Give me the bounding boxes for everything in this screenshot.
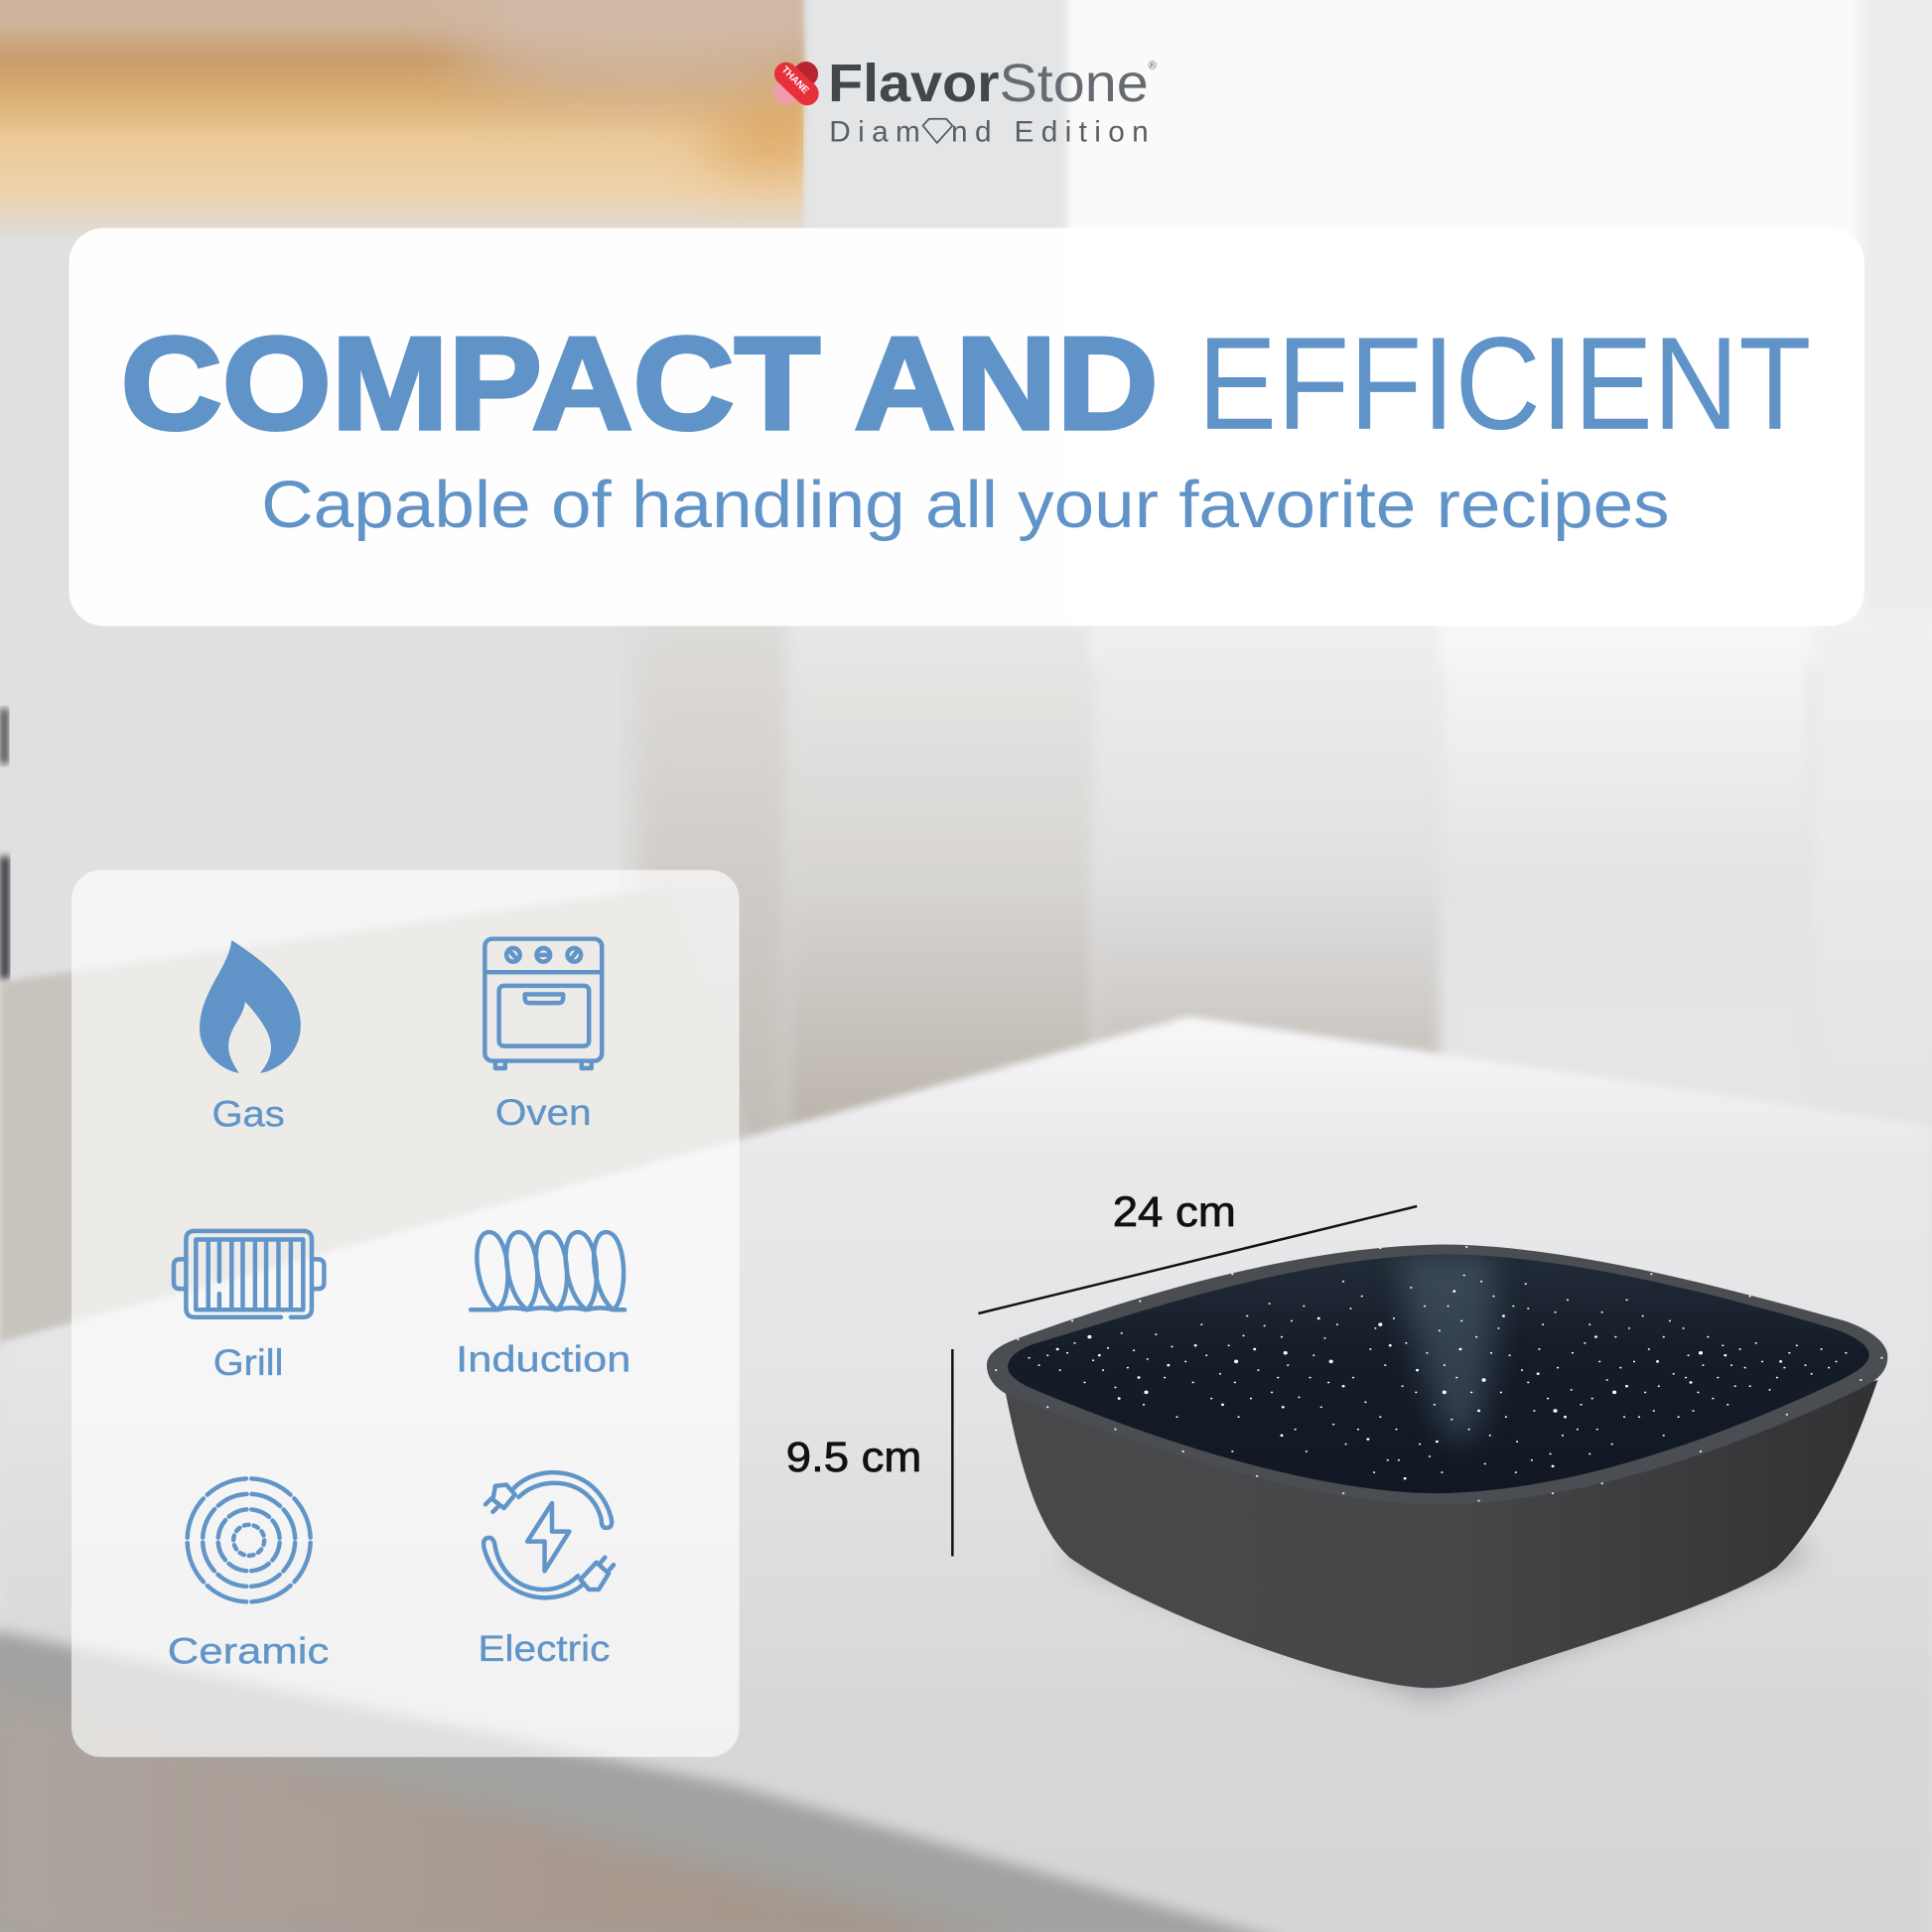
icon: gas flame <box>200 940 301 1073</box>
panel: headline card <box>69 228 1864 625</box>
icon: electric <box>483 1472 614 1597</box>
bowl highlight <box>1399 1254 1495 1440</box>
label: 24 cm: 24 cm <box>1113 1188 1236 1235</box>
label: Gas: Gas <box>211 1092 285 1134</box>
icon: diamond <box>923 119 952 143</box>
bowl shadow <box>1062 1528 1811 1698</box>
dimension: width <box>978 1188 1417 1313</box>
bowl rim <box>987 1244 1887 1504</box>
bowl interior <box>1008 1254 1869 1493</box>
icon: ceramic hob <box>188 1478 311 1601</box>
panel: compatible cooktops <box>71 870 740 1757</box>
icon: induction coil <box>471 1232 624 1310</box>
bowl body <box>1006 1380 1877 1688</box>
heading light part: EFFICIENT <box>1197 311 1811 458</box>
icon: heart logo: THANE <box>779 65 811 96</box>
rim speckles <box>996 1247 1882 1501</box>
label: Induction: Induction <box>456 1337 630 1379</box>
label: Grill: Grill <box>213 1341 283 1383</box>
edition line: Diam o nd Edition <box>829 116 1149 149</box>
heading: COMPACT AND <box>121 311 1159 458</box>
icon: grill <box>174 1231 324 1317</box>
subtitle: Capable of handling all your favorite recipes <box>261 468 1670 542</box>
brand name: Flavor Stone <box>828 55 1149 113</box>
label: Electric: Electric <box>479 1627 610 1669</box>
product: square bowl <box>987 1244 1887 1698</box>
label: Ceramic: Ceramic <box>168 1629 329 1671</box>
icon: heart logo <box>773 62 818 104</box>
label: 9.5 cm: 9.5 cm <box>786 1434 921 1480</box>
granite speckles <box>1029 1276 1847 1478</box>
icon: oven <box>484 939 602 1068</box>
label: Oven: Oven <box>495 1091 592 1133</box>
logo <box>773 55 1158 149</box>
registered mark: ® <box>1149 60 1158 71</box>
